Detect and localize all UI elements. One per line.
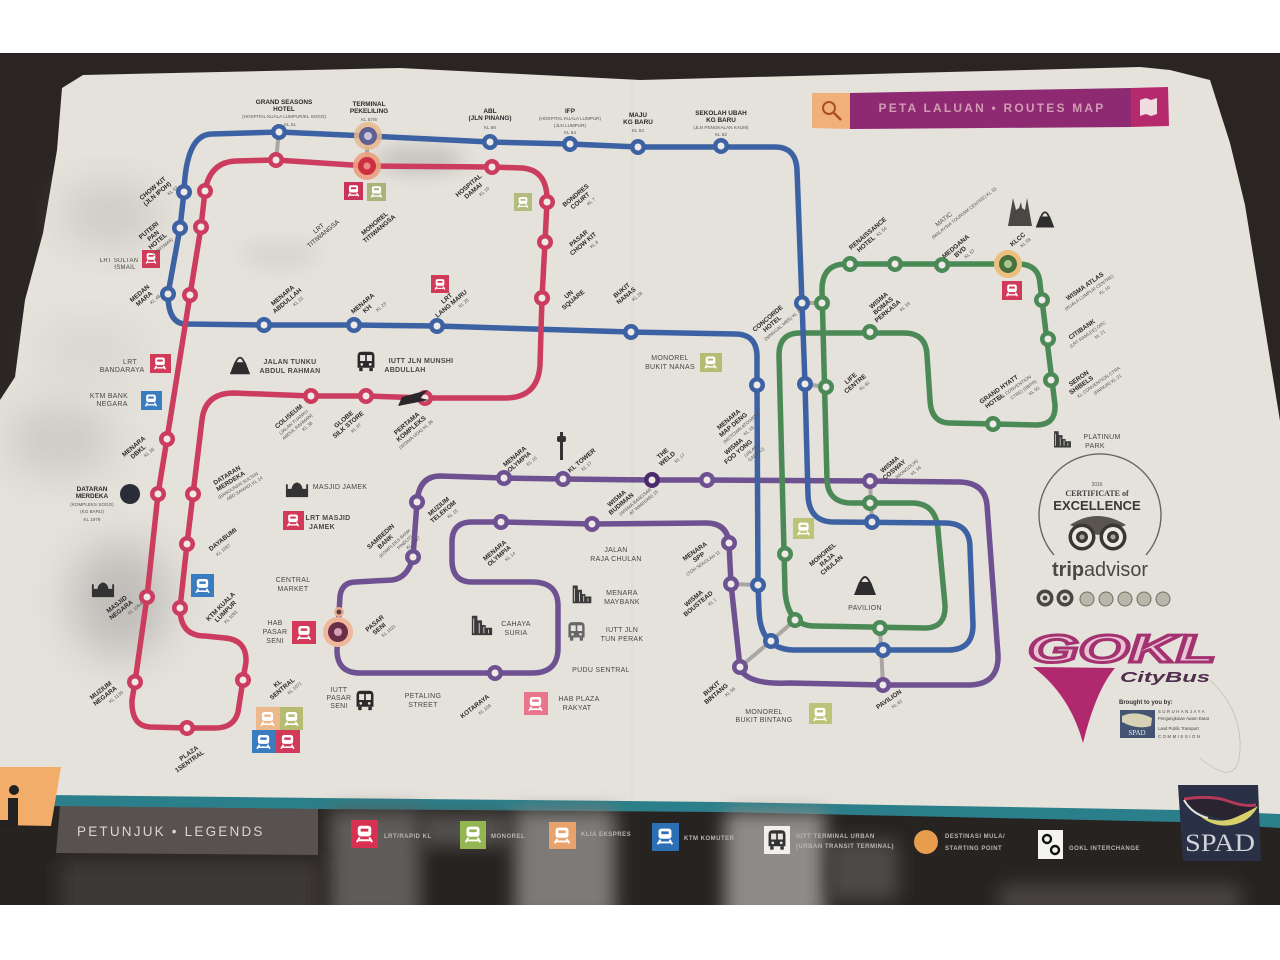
label group: top row: MAJU — [629, 112, 647, 119]
label group: red central and south: DAYABUMI — [208, 527, 238, 553]
legend: starting point — [914, 830, 1005, 854]
label group: blue and red north: ABDULLAH — [272, 287, 304, 315]
label group: purple: GADING) — [747, 446, 766, 463]
label group: top row: PEKELILING — [350, 108, 388, 115]
label group: blue and red north: KL 23 — [375, 301, 388, 313]
label group: green: PERKASA — [874, 299, 903, 324]
label group: red central and south: NEGARA — [108, 599, 135, 622]
label group: purple: PAVILION — [875, 689, 903, 711]
label group: blue and red north: UN — [563, 289, 575, 300]
label group: purple: OLYMPIA — [506, 450, 533, 474]
label group: landmark names: CENTRAL — [276, 577, 310, 584]
label group: green: RENAISSANCE — [848, 216, 888, 251]
label group: landmark names: MONOREL — [745, 709, 783, 716]
label group: top row: (JLN LUMPUR) — [554, 123, 586, 128]
label group: blue and red north: HOTEL — [147, 232, 169, 251]
label group: green: KL 58 — [1019, 237, 1032, 248]
label group: landmark names: ABDULLAH — [384, 367, 426, 374]
label group: landmark names: HAB PLAZA — [558, 696, 600, 703]
label group: landmark names: SENI — [330, 703, 348, 710]
label group: top row: KL 57/8 — [361, 117, 377, 122]
label group: purple: BINTANG — [703, 682, 730, 706]
legend: urban transit terminal: (URBAN TRANSIT TERMINAL) — [796, 844, 894, 850]
label group: purple: KL TOWER — [567, 447, 597, 474]
label group: landmark names: JAMEK — [309, 524, 335, 531]
label group: red central and south: SILK STORE — [332, 410, 366, 440]
label group: red central and south: KL 36 — [143, 446, 156, 458]
label group: landmark names: SENI — [266, 638, 284, 645]
label group: purple: BUDIMAN — [608, 492, 636, 517]
TripAdvisor certificate badge — [1039, 454, 1161, 581]
label group: green: RAJA — [819, 552, 837, 568]
label group: purple: (JALAN — [743, 444, 758, 458]
label group: landmark names: BANDARAYA — [100, 367, 144, 374]
label group: top row: HOTEL — [273, 106, 295, 113]
label group: purple: KL 1097 — [405, 535, 422, 550]
legend title bar — [56, 806, 318, 855]
label group: blue and red north: (NINGGAL MBS) KL 38 — [763, 307, 803, 342]
label group: purple: KL 17 — [580, 460, 593, 472]
label group: purple: FOO YONG — [723, 438, 754, 466]
label group: purple: BANK — [376, 533, 395, 551]
label group: red central and south: DATARAN — [77, 486, 107, 493]
route: red line — [132, 160, 547, 728]
folded paper sheet — [0, 67, 1280, 830]
label group: red central and south: (BANGUNAN SULTAN — [217, 471, 259, 500]
route: purple line — [337, 476, 998, 685]
label group: blue and red north: BONDRES — [562, 183, 591, 209]
label group: landmark names: PASAR — [327, 695, 351, 702]
label group: blue and red north: KL 7 — [586, 196, 597, 206]
label group: landmark names: HAB — [267, 620, 283, 627]
legend: starting point: STARTING POINT — [945, 846, 1002, 852]
label group: purple: OLYMPIA — [486, 544, 513, 568]
label group: green: BVD — [953, 245, 968, 259]
label group: green: KL 93 — [1028, 385, 1041, 396]
label group: red central and south: MASJID — [105, 595, 129, 615]
label group: purple: MUZIUM — [427, 496, 451, 518]
stations: blue line — [160, 124, 891, 658]
label group: landmark names: PUDU SENTRAL — [572, 667, 630, 674]
label group: blue and red north: HOTEL — [762, 315, 783, 334]
label group: blue and red north: MEDAN — [129, 284, 151, 304]
label group: green: CENTRE — [843, 373, 868, 395]
label group: blue and red north: CONCORDE — [752, 304, 785, 334]
label group: green: CITIBANK — [1068, 318, 1097, 341]
label group: purple: BUKIT — [702, 680, 722, 698]
label group: top row: (JLN PENGKALAN KAUM) — [693, 125, 749, 130]
label group: landmark names: PLATINUM — [1083, 434, 1121, 441]
label group: purple: AT WARISAN) 15 — [628, 489, 659, 516]
label group: red central and south: KL 37 — [350, 422, 363, 434]
label group: green: (MALAYSIA TOURISM CENTRE) KL 55 — [931, 186, 998, 240]
label group: landmark names: BUKIT BINTANG — [736, 717, 792, 724]
GOKL CityBus logo: Brought to you by: — [1119, 700, 1173, 706]
label group: purple: (KOMPLEKS BANK — [378, 527, 412, 559]
label group: red central and south: KL 1084 — [127, 601, 144, 616]
label group: purple: KL 16 — [526, 455, 538, 467]
label group: top row: (HOSPITAL KUALA LUMPUR/KL SOGO) — [242, 114, 326, 119]
label group: purple: PINDUT) — [396, 534, 414, 550]
label group: red central and south: PERTAMA — [393, 411, 421, 437]
label group: blue and red north: MENARA — [350, 292, 376, 316]
label group: top row — [242, 99, 749, 137]
label group: green: (KL CONVENTION — [997, 374, 1032, 401]
label group: green — [808, 180, 1126, 579]
label group: blue and red north: DAMAI — [463, 182, 484, 201]
legend: starting point: DESTINASI MULA/ — [945, 834, 1005, 840]
GOKL CityBus logo: GOKL — [1028, 628, 1216, 671]
label group: purple: KL 1 — [707, 597, 718, 607]
GOKL CityBus logo: CityBus — [1120, 669, 1210, 686]
routes map title banner — [812, 87, 1169, 129]
label group: landmark names: PAVILION — [848, 605, 882, 612]
label group: red central and south: ABDUL RAHMAN) — [281, 412, 314, 441]
label group: landmark names: LRT — [123, 359, 137, 366]
SPAD logo — [1178, 785, 1261, 861]
label group: purple: KOTARAYA — [459, 693, 491, 720]
TripAdvisor certificate badge: CERTIFICATE of — [1065, 489, 1129, 498]
label group: green: HOTEL — [984, 392, 1006, 410]
legend: GOKL interchange: GOKL INTERCHANGE — [1069, 846, 1140, 852]
label group: green: COSWAY — [882, 458, 908, 482]
legend title bar: PETUNJUK • LEGENDS — [77, 824, 265, 839]
label group: green: KLCC — [1009, 231, 1027, 248]
label group: green: BOMAS — [872, 295, 895, 317]
label group: blue and red north: KL 25 — [458, 297, 470, 309]
label group: purple: KL 17 — [674, 452, 686, 464]
label group: purple: KL 56 — [724, 686, 737, 698]
label group: purple: SPP — [692, 551, 707, 564]
label group: landmark names: LRT SULTAN — [100, 258, 138, 264]
label group: red central and south: DATARAN — [212, 465, 242, 487]
route: blue line — [168, 132, 973, 650]
label group: purple: THE — [656, 447, 670, 461]
label group: landmark names — [90, 258, 1121, 724]
label group: purple: WISMA — [723, 437, 745, 457]
interchange links — [276, 132, 883, 685]
label group: blue and red north: PASAR — [568, 229, 590, 249]
label group: purple: MENARA — [482, 539, 508, 563]
stations: green line — [777, 256, 1059, 636]
label group: green: KL 10 — [1098, 285, 1111, 296]
legend: LRT: LRT/RAPID KL — [384, 834, 432, 840]
label group: green: WISMA — [868, 291, 890, 311]
label group: top row: (JLN PINANG) — [469, 115, 511, 122]
label group: purple: (WISMA BANGSAR — [618, 486, 653, 517]
label group: landmark names: JALAN — [604, 547, 628, 554]
label group: red central and south: MERDEKA — [215, 470, 247, 493]
starting points (orange halo stations) — [323, 122, 1022, 647]
label group: purple: PASAR — [364, 614, 386, 634]
legend: monorail — [460, 821, 525, 849]
label group: blue and red north: LRT — [440, 292, 454, 306]
label group: red central and south: MUZIUM — [89, 680, 113, 701]
label group: purple: MENARA — [682, 541, 709, 563]
label group: green: (KUALA LUMPUR CENTRE) — [1064, 273, 1115, 311]
legend: KLIA express: KLIA EKSPRES — [581, 832, 631, 838]
label group: red central and south: 1SENTRAL — [174, 749, 206, 774]
label group: red central and south: MENARA — [121, 435, 147, 459]
label group: green: SERON — [1068, 369, 1090, 388]
label group: blue and red north: MAP DENG — [718, 411, 749, 439]
label group: landmark names: STREET — [408, 702, 438, 709]
label group: purple — [364, 430, 907, 726]
legend: urban transit terminal — [764, 826, 894, 854]
label group: blue and red north: COURT — [570, 191, 592, 211]
TripAdvisor certificate badge: tripadvisor — [1052, 559, 1148, 581]
label group: green: WISMA — [879, 455, 901, 475]
label group: red central and south: SENTRAL — [269, 677, 296, 702]
label group: blue and red north: MARA — [135, 290, 154, 308]
label group: blue and red north: SQUARE — [561, 288, 587, 312]
label group: green: LIFE — [843, 372, 859, 386]
label group: blue and red north: CHOW KIT — [569, 231, 598, 257]
label group: blue and red north: TITIWANGSA — [362, 213, 397, 245]
label group: top row: (HOSPITAL KUALA LUMPUR) — [539, 116, 601, 121]
label group: landmark names: MAYBANK — [604, 599, 640, 606]
label group: landmark names: LRT MASJID — [306, 515, 350, 522]
GOKL CityBus logo: Land Public Transport — [1158, 726, 1200, 731]
GOKL CityBus logo: Pengangkutan Awam Darat — [1158, 716, 1210, 721]
label group: red central and south — [70, 402, 434, 774]
label group: top row: KG BARU — [623, 119, 653, 126]
label group: red central and south: DBKL — [129, 444, 148, 461]
label group: landmark names: MONOREL — [651, 355, 689, 362]
label group: red central and south: NEGARA — [92, 685, 119, 708]
label group: top row: GRAND SEASONS — [256, 99, 312, 106]
label group: green: KL CONVENTION CTRA — [1076, 365, 1122, 399]
label group: blue and red north: KL 48 — [149, 293, 162, 305]
label group: top row: ABL — [483, 108, 497, 115]
label group: green: KL 57 — [963, 248, 976, 259]
label group: purple: WISMA — [683, 589, 705, 609]
label group: blue and red north: BUKIT — [612, 282, 632, 300]
label group: green: (LRT RAMLEE) ORC — [1069, 320, 1107, 349]
label group: red central and south: KTM KUALA — [205, 591, 237, 623]
transit icons — [92, 182, 1071, 753]
label group: red central and south: ABD SAMAD) KL 14 — [226, 475, 264, 502]
label group: green: KL 81 — [858, 380, 871, 391]
label group: landmark names: MASJID JAMEK — [313, 484, 367, 491]
label group: green: SHIBELS — [1068, 374, 1095, 396]
label group: green: (PARKIR) KL 21 — [1093, 373, 1123, 396]
label group: top row: TERMINAL — [352, 101, 386, 108]
label group: red central and south: KL 1979 — [84, 517, 101, 522]
label group: red central and south: KL — [273, 678, 284, 689]
label group: top row: KG BARU — [706, 117, 736, 124]
label group: purple: KL 1021 — [381, 623, 397, 638]
GOKL CityBus logo: COMMISSION — [1158, 734, 1201, 739]
label group: purple: KL 15 — [446, 508, 459, 519]
label group: landmark names: ABDUL RAHMAN — [259, 368, 321, 375]
label group: top row: SEKOLAH UBAH — [695, 110, 747, 117]
label group: blue and red north: LANG MARU — [434, 289, 469, 319]
legend: monorail: MONOREL — [491, 834, 525, 840]
label group: blue and red north: LRT — [312, 222, 326, 235]
label group: blue and red north: HOSPITAL — [455, 173, 483, 199]
GOKL CityBus logo — [1028, 628, 1216, 743]
label group: blue and red north: KL 52 — [167, 185, 179, 196]
label group: landmark names: PASAR — [263, 629, 287, 636]
label group: green: GRAND HYATT — [979, 374, 1020, 406]
label group: landmark names: IUTT — [331, 687, 347, 694]
TripAdvisor certificate badge: 2016 — [1091, 482, 1103, 488]
label group: blue and red north: KL 10 — [478, 185, 491, 197]
stations: red line — [127, 152, 555, 736]
legend: KLIA express — [549, 822, 631, 849]
label group: purple: BOUSTEAD — [683, 590, 715, 618]
SPAD logo: SPAD — [1185, 830, 1255, 857]
bottom legend band — [0, 767, 1280, 905]
label group: green: MONOREL — [808, 542, 838, 568]
label group: top row: KL 52 — [715, 132, 727, 137]
label group: red central and south: GLOBE — [333, 410, 355, 430]
label group: landmark names: IUTT JLN — [606, 627, 638, 634]
label group: landmark names: KTM BANK — [90, 393, 128, 400]
station labels — [70, 99, 1126, 774]
label group: blue and red north: MENARA — [716, 408, 742, 432]
label group: green: (MONGOLIA) — [894, 458, 919, 480]
label group: blue and red north: KL 18 — [743, 425, 755, 437]
label group: red central and south: KL 1067 — [215, 542, 232, 557]
pen mark — [1200, 680, 1240, 772]
label group: red central and south: KL 1071 — [287, 681, 303, 696]
label group: green: KL 21 — [1094, 329, 1107, 340]
label group: red central and south: KL 1130 — [108, 690, 124, 704]
label group: landmark names: RAJA CHULAN — [590, 556, 642, 563]
GOKL CityBus logo: SURUHANJAYA — [1158, 709, 1206, 714]
label group: purple: SAMBEDIN — [366, 523, 396, 551]
orange info box — [0, 767, 61, 826]
label group: red central and south: (JALAN TUANKU — [278, 409, 309, 436]
label group: red central and south: KL 38 — [301, 420, 314, 432]
label group: green: MEDGANA — [941, 234, 971, 260]
label group: purple: TELEKOM — [429, 499, 458, 525]
label group: top row: KL 54 — [564, 130, 576, 135]
legend: urban transit terminal: IUTT TERMINAL URBAN — [796, 834, 875, 840]
label group: blue and red north: (PERTAMA) — [151, 237, 174, 257]
label group: green: CTRE) (SBPR) — [1009, 379, 1038, 401]
label group: landmark names: PARK — [1085, 443, 1105, 450]
label group: red central and south: (KOMPLEKS SOGO) — [70, 502, 114, 507]
label group: landmark names: TUN PERAK — [601, 636, 643, 643]
label group: blue and red north: KH — [362, 303, 374, 315]
label group: purple: KL 62 — [891, 698, 904, 709]
label group: landmark names: CAHAYA — [501, 621, 531, 628]
label group: red central and south: (WISMA UOA) KL 36 — [398, 419, 434, 450]
TripAdvisor rating row — [1036, 590, 1170, 606]
label group: blue and red north: CHOW KIT — [138, 176, 168, 202]
label group: blue and red north: MONOREL — [360, 211, 390, 237]
station centres — [132, 128, 1054, 732]
label group: red central and south: LUMPUR — [214, 599, 238, 624]
label group: purple: WELD — [658, 450, 677, 468]
label group: blue and red north: MENARA — [270, 284, 296, 308]
label group: blue and red north: NANAS — [616, 286, 638, 306]
label group: green: MATIC — [934, 211, 954, 229]
label group: red central and south: (KG BARU) — [80, 509, 104, 514]
label group: blue and red north: KL 28 — [631, 290, 644, 302]
label group: purple: KL 108 — [478, 703, 492, 716]
label group: landmark names: JALAN TUNKU — [263, 359, 317, 366]
label group: red central and south: PLAZA — [178, 745, 200, 763]
label group: red central and south: KOMPLEKS — [395, 414, 428, 444]
label group: red central and south: COLISEUM — [274, 403, 304, 430]
label group: purple: WISMA — [606, 489, 628, 509]
stations: purple line — [405, 470, 891, 693]
label group: top row: KL 56 — [484, 125, 496, 130]
label group: purple: MENARA — [502, 445, 528, 469]
routes map title banner: PETA LALUAN • ROUTES MAP — [878, 101, 1106, 115]
label group: green: KL 16 — [910, 465, 922, 476]
TripAdvisor certificate badge: EXCELLENCE — [1053, 498, 1141, 513]
label group: blue and red north: (MCTOWN ATOWER) — [722, 411, 760, 444]
label group: landmark names: NEGARA — [96, 401, 128, 408]
label group: blue and red north: KL 8 — [589, 239, 600, 249]
label group: green: HOTEL — [856, 235, 877, 254]
label group: landmark names: ISMAIL — [114, 265, 136, 271]
label group: top row: KL 53 — [632, 128, 644, 133]
label group: purple: KL 14 — [504, 550, 517, 562]
legend: KTM — [652, 823, 735, 851]
GOKL CityBus logo: SPAD — [1128, 729, 1146, 737]
legend: GOKL interchange — [1038, 830, 1140, 859]
label group: landmark names: RAKYAT — [563, 705, 592, 712]
label group: landmark names: MARKET — [278, 586, 309, 593]
label group: blue and red north: TITIWANGSA — [306, 218, 341, 250]
label group: red central and south: KL 1081 — [223, 609, 239, 625]
label group: landmark names: PETALING — [405, 693, 441, 700]
label group: blue and red north: PAN — [146, 229, 161, 243]
label group: landmark names: SURIA — [505, 630, 527, 637]
label group: green: CHULAN — [819, 554, 845, 577]
label group: green: KL 33 — [899, 301, 911, 312]
legend: KTM: KTM KOMUTER — [684, 836, 735, 842]
label group: landmark names: MENARA — [606, 590, 638, 597]
label group: top row: IFP — [565, 108, 575, 115]
label group: landmark names: BUKIT NANAS — [645, 364, 695, 371]
label group: purple: SENI — [372, 622, 388, 637]
label group: green: KL 54 — [876, 225, 888, 237]
label group: top row: KL 51 — [284, 122, 296, 127]
label group: blue and red north: KL 22 — [292, 295, 305, 307]
legend: LRT — [351, 820, 432, 848]
label group: blue and red north — [129, 173, 803, 450]
label group: blue and red north: (JLN IPOH) — [142, 181, 173, 208]
label group: landmark names: IUTT JLN MUNSHI — [389, 358, 453, 365]
route: green line — [779, 264, 1055, 628]
label group: purple: (TOH SEKOLAH 11 — [685, 549, 721, 577]
label group: red central and south: MERDEKA — [76, 493, 109, 500]
label group: blue and red north: PUTERI — [138, 221, 160, 241]
label group: green: WISMA ATLAS — [1065, 271, 1105, 302]
